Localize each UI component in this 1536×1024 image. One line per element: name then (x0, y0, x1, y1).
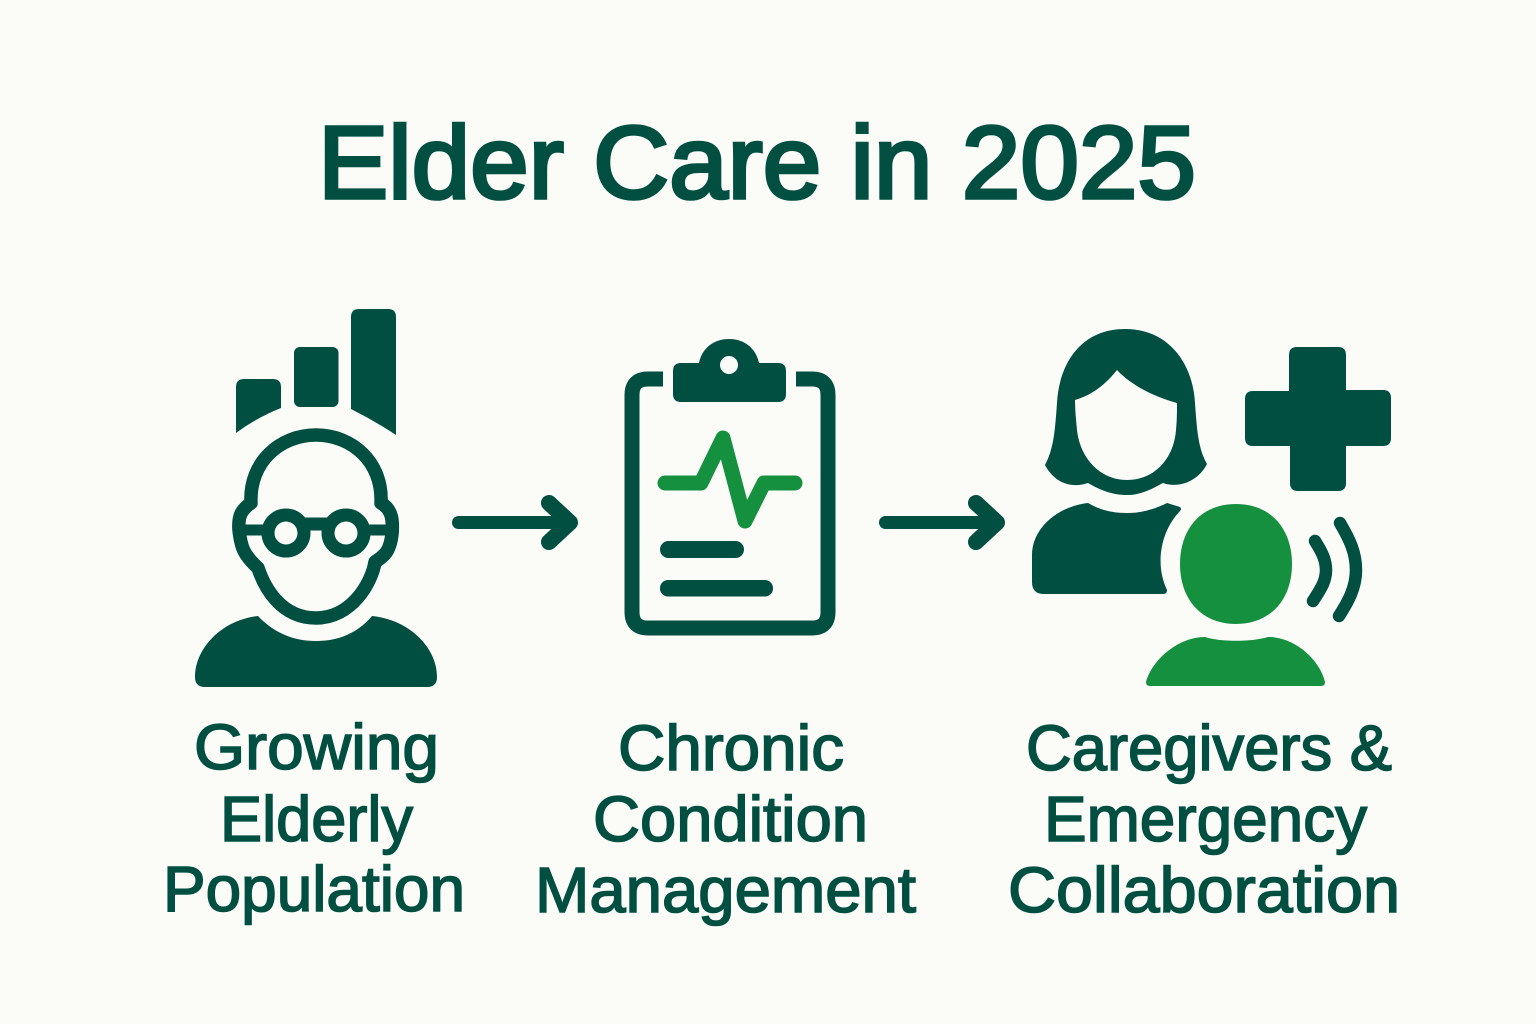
label: caregivers and emergency collaboration: Emergency (1044, 783, 1367, 855)
icon: caregiver hair and face (1045, 329, 1207, 495)
icon: clipboard frame (632, 379, 828, 628)
label: caregivers and emergency collaboration: Collaboration (1008, 854, 1400, 926)
icon: elderly person with growth bars (195, 309, 437, 687)
icon: medical cross (1245, 347, 1391, 491)
icon: text lines (660, 541, 773, 596)
label: growing elderly population: Growing (194, 711, 439, 783)
label: growing elderly population: Population (163, 853, 465, 925)
label: growing elderly population: Elderly (220, 783, 413, 855)
icon: heartbeat line (665, 438, 795, 521)
label: chronic condition management: Management (535, 854, 916, 926)
label: chronic condition management (535, 712, 916, 926)
icon: head outline (239, 435, 392, 618)
icon: clipboard clip (673, 339, 786, 402)
icon: caregiver, medical cross and emergency contact (1032, 329, 1391, 686)
arrow: population to chronic conditions (458, 503, 570, 542)
label: caregivers and emergency collaboration (1008, 712, 1400, 926)
icon: signal waves (1313, 523, 1356, 616)
label: chronic condition management: Condition (593, 783, 868, 855)
title: Elder Care in 2025 (318, 105, 1196, 220)
icon: glasses (234, 515, 398, 551)
icon: contact shoulders (1146, 637, 1325, 686)
icon: caregiver body (1032, 503, 1181, 594)
icon: clipboard with heartbeat (632, 339, 828, 628)
label: growing elderly population (163, 711, 465, 925)
label: chronic condition management: Chronic (618, 712, 844, 784)
arrow: chronic conditions to caregivers (886, 503, 997, 542)
icon: growth bars (236, 309, 396, 435)
icon: contact head (1180, 504, 1292, 624)
icon: shoulders (195, 616, 437, 687)
label: caregivers and emergency collaboration: Caregivers & (1026, 712, 1392, 784)
